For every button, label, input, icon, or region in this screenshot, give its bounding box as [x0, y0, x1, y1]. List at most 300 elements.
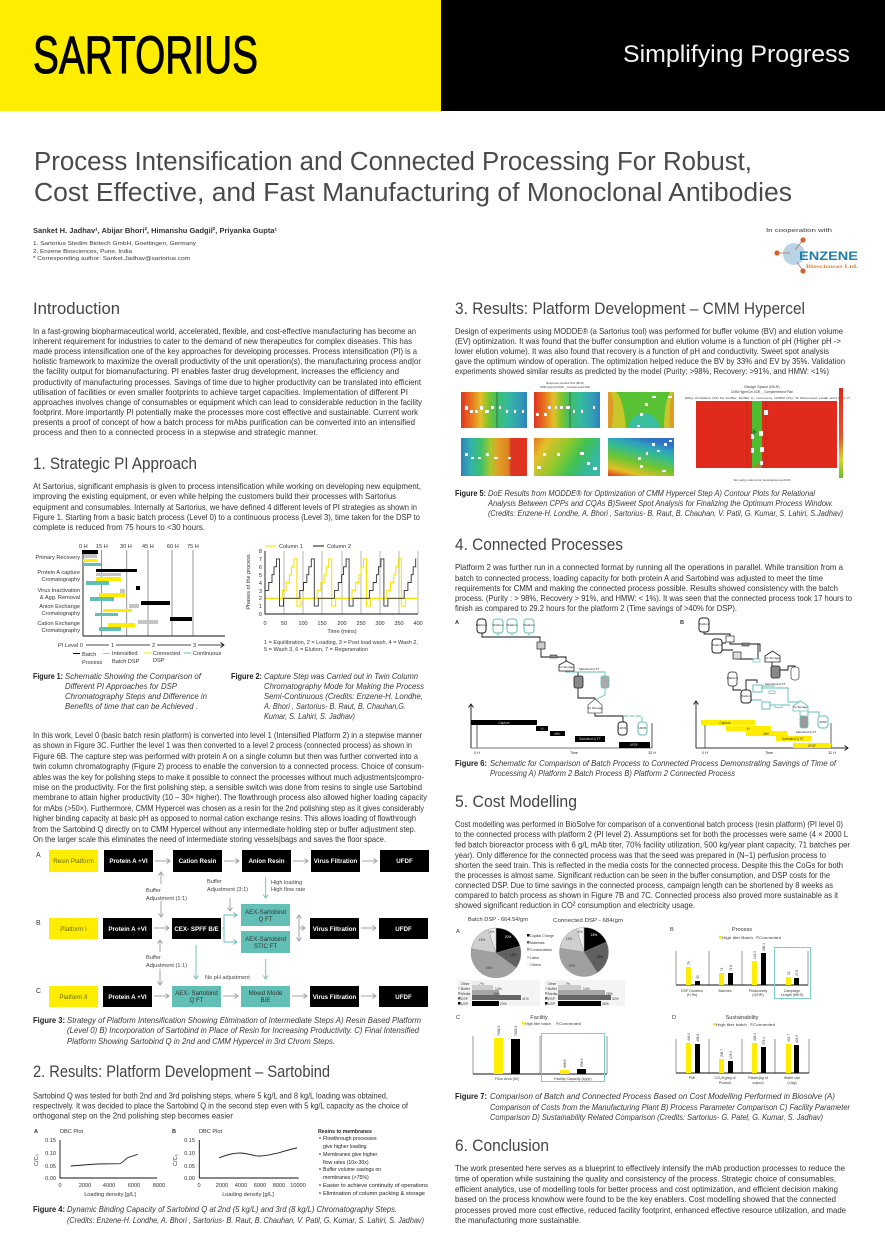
pie: batch DSP: 20%: [505, 935, 511, 939]
pie: batch DSP: 6%: [490, 930, 494, 934]
text block: introduction: process and then to a connected process in a stepwise and strategic manner.: [33, 427, 318, 437]
title: Process Intensification and Connected Processing For Robust,: [34, 148, 752, 176]
authors and affiliations: Sanket H. Jadhav¹, Abijar Bhori², Himanshu Gadgil², Priyanka Gupta¹: [33, 226, 277, 235]
figure 7D: sustainability bars: Connected: [753, 1023, 775, 1027]
figure 5 caption: DoE Results from MODDE® for Optimization of CMM Hypercel Step A) Contour Plots for Relational: [488, 488, 816, 498]
list: resins to membranes: Easier to achieve continuity of operations: [323, 1183, 428, 1189]
figure 7B: process bars: DSP Duration: [681, 989, 703, 993]
text block: cost modelling: connected DSP. Due to time savings in the connected process, campaign length can be shortened by 8 weeks as: [455, 880, 833, 890]
figure 7B: process bars: Campaign: [784, 989, 800, 993]
text block: CMM Hypercel: [455, 326, 845, 376]
row C: platform II: Protein A +VI: [108, 994, 147, 1001]
text block: connected processes: process. (Purity : > 98%, Recovery > 91%, and HMW: < 1%). It was seen that the connected process took 17 hours to: [455, 593, 852, 603]
figure 7B: process bars: High titer Batch: [722, 936, 753, 940]
text block: level conversion description: mise on the productivity. For the first polishing step, a sensible switch was done from resins to single use Sartobind: [33, 782, 422, 792]
figure 6B: connected process schematic: Sartobind Q FT: [796, 730, 816, 734]
figure 1: Gantt chart of PI approaches: 45 H: [142, 544, 154, 550]
text block: introduction: approaches involves change of consumables or equipment which can lead to considerable reduction in the facility: [33, 397, 423, 407]
pie legend: Others: [530, 963, 541, 967]
figure 7B: process bars: B: [670, 927, 674, 933]
figure 1: Gantt chart of PI approaches: 3: [193, 643, 196, 649]
row B: platform I: CEX- SPFF B/E: [174, 926, 219, 933]
figure 7C: facility bars: 498.6: [563, 1059, 567, 1068]
figure 4 caption: (Credits: Enzene-H. Londhe, A. Bhori , Sartorius- B. Raut, B. Chauhan, V. Patil, G. Kumar, S. Lahiri, S. Jadhav): [67, 1215, 424, 1225]
list: resins to membranes: Elimination of column packing & storage: [323, 1191, 425, 1197]
figure 1 caption: Different PI Approaches for DSP: [65, 681, 177, 691]
authors and affiliations: * Corresponding author: Sanket.Jadhav@sartorius.com: [33, 256, 190, 262]
row C: platform II: UFDF: [395, 994, 412, 1001]
figure 7D: sustainability bars: Sustainability: [726, 1015, 759, 1021]
figure 7D: sustainability bars: Product: [719, 1081, 731, 1085]
figure 4A: DBC plot: 0.00: [45, 1176, 56, 1182]
row C: platform II: AEX- Sartobind: [175, 990, 218, 997]
row A: resin platform: [36, 850, 429, 872]
bars: batch breakdown: 14%: [495, 987, 502, 991]
figure 7B: process bars: 142.9: [753, 951, 757, 959]
figure 6A: batch process schematic: Sartobind Q FT: [579, 667, 599, 671]
row B: platform I: [36, 904, 428, 953]
figure 4B: DBC plot: DBC Plot: [199, 1129, 222, 1135]
figure 2: twin column phase chart: 200: [337, 621, 347, 627]
figure 7D: sustainability bars: 448.4: [753, 1033, 757, 1041]
authors and affiliations: 2. Enzene Biosciences, Pune, India: [33, 249, 133, 255]
figure 1: Gantt chart of PI approaches: Batch DSP: [112, 659, 140, 665]
figure 4A: DBC plot: A: [34, 1129, 38, 1135]
figure 7A: cost pies and bars: Connected DSP - 684/gm: [553, 918, 623, 924]
figure 7B: process bars: (G/HR): [752, 993, 764, 997]
text block: strategic PI approach: improving the existing equipment, or even while helping the customers build their processes with Sartorius: [33, 491, 396, 501]
figure 1: Gantt chart of PI approaches: & Agg. Removal: [40, 595, 80, 601]
heading: Connected Processes: 4. Connected Processes: [455, 536, 623, 554]
figure 4A: DBC plot: [34, 1129, 165, 1198]
timeline B: VI: [746, 727, 750, 731]
figure 2: twin column phase chart: 1: [259, 604, 262, 610]
text block: conclusion: time of operation while sustaining the quality and consistency of the process. Strategic choice of consumables,: [455, 1174, 836, 1184]
text block: level conversion description: twin column chromatography (Figure 2) process to enable the conversion to a connected process. Choice of consum-: [33, 761, 424, 771]
figure 6A: batch process schematic: A: [455, 620, 459, 626]
figure 2: twin column phase chart: Time (mins): [327, 629, 357, 635]
text block: level conversion description: In this work, Level 0 (basic batch resin platform) is converted into level 1 (Intensified Platform 2) in a stepwise manner: [33, 730, 422, 740]
figure 1: Gantt chart of PI approaches: Cromatography: [41, 611, 80, 617]
figure 4B: DBC plot: C/C₀: [173, 1153, 179, 1166]
bars: connected breakdown: 28%: [606, 992, 613, 996]
text block: connected processes: [455, 562, 852, 613]
figure 6B: connected process schematic: Platform: [740, 694, 752, 698]
figure 2: twin column phase chart: 8: [259, 549, 262, 555]
figure 1: Gantt chart of PI approaches: 75 H: [187, 544, 199, 550]
bars: connected breakdown: DSP: [548, 997, 556, 1001]
figure 7B: process bars: 186.4: [762, 943, 766, 951]
text block: connected processes: Platform 2 was further run in a connected format by running all the operations in parallel. While transition from a: [455, 562, 843, 572]
figure 2: twin column phase chart: 4: [259, 581, 262, 587]
row B: platform I: Protein A +VI: [108, 926, 147, 933]
bars: batch breakdown: Buffer: [461, 987, 471, 991]
figure 7B: process bars: 52: [787, 971, 791, 975]
bars: connected breakdown: [545, 980, 625, 1006]
figure 4A: DBC plot: C/C₀: [34, 1153, 40, 1166]
figure 7B: process bars: Batches: [718, 989, 732, 993]
process flow lines: [704, 632, 819, 716]
figure 1: Gantt chart of PI approaches: 15 H: [96, 544, 108, 550]
figure 5A: DoE contour plots: Response Contour Plot (MLR): [546, 381, 584, 385]
figure 4B: DBC plot: 8000: [273, 1183, 285, 1189]
row C: platform II: [36, 986, 428, 1007]
figure 7D: sustainability bars: Water use: [784, 1076, 800, 1080]
text block: introduction: presents a proof of concept of how a batch process for mAbs purification can be converted into an intensified: [33, 417, 415, 427]
timeline A: VI: [540, 727, 544, 731]
timeline A: Time: [570, 751, 578, 755]
list: resins to membranes: Flowthrough processes: [323, 1136, 377, 1142]
figure 7C: facility bars: 598.5: [580, 1058, 584, 1067]
contour panels: [461, 392, 674, 476]
heading: Platform Development Sartobind: 2. Results: Platform Development – Sartobind: [33, 1063, 330, 1081]
text block: level conversion description: as shown in Figure 3C. Further the level 1 was then converted to a level 2 process (connected process) as shown in: [33, 740, 412, 750]
connector annotations: High flow rate: [271, 887, 305, 893]
timeline B: Time: [765, 751, 773, 755]
title: Cost Effective, and Fast Manufacturing of Monoclonal Antibodies: [34, 179, 792, 207]
bars: batch breakdown: [458, 980, 540, 1006]
figure 7C: facility bars: Connected: [559, 1022, 581, 1026]
row B: platform I: Q FT: [258, 916, 273, 923]
pie: connected DSP: 37%: [569, 964, 575, 968]
text block: cost modelling: fed batch bioreactor process with 6 g/L mAb titer, 70% facility utilization, 500 kg/year plant capacity, 71 batches per: [455, 840, 850, 850]
text block: level conversion description: for mAbs (>50×). Furthermore, CMM Hypercel was chosen as a resin for the 2nd polishing step as it gives considerably: [33, 803, 425, 813]
text block: cost modelling: shorten the seed train. This is reflected in the media costs for the connected process. Despite this the CoGs for both: [455, 860, 843, 870]
figure 1: Gantt chart of PI approaches: Cation Exchange: [37, 621, 80, 627]
timeline A: Sartobind Q FT: [579, 737, 601, 741]
figure 6B: connected process schematic: Platform: [727, 676, 739, 680]
figure 4 caption: [33, 1204, 424, 1225]
figure 7A: cost pies and bars: [456, 917, 625, 1006]
figure 3 caption: Figure 3:: [33, 1015, 65, 1025]
figure 1: Gantt chart of PI approaches: Primary Recovery: [36, 555, 80, 561]
figure 1: Gantt chart of PI approaches: Cromatography: [41, 577, 80, 583]
timeline B: UFDF: [808, 744, 816, 748]
row A: resin platform: Anion Resin: [248, 858, 285, 865]
bars: batch breakdown: Other: [461, 982, 470, 986]
figure 1: Gantt chart of PI approaches: Process: [82, 660, 102, 666]
row A: resin platform: Resin Platform: [53, 858, 94, 865]
text block: introduction: made process intensification one of the key approaches for developing processes. Process intensification (PI) is a: [33, 346, 417, 356]
figure 4A: DBC plot: 4000: [103, 1183, 115, 1189]
bars: connected breakdown: Other: [548, 982, 557, 986]
figure 2: twin column phase chart: Column 1: [279, 544, 303, 550]
figure 2: twin column phase chart: 5: [259, 573, 262, 579]
figure 5B: sweet spot plot: Not using model error, Acceptance level=0%: [734, 478, 791, 482]
figure 2: twin column phase chart: 350: [394, 621, 404, 627]
heading: Strategic PI Approach: 1. Strategic PI Approach: [33, 455, 197, 473]
connector annotations: High loading: [271, 880, 302, 886]
pie legend: Capital Charge: [530, 934, 554, 938]
text block: strategic PI approach: Figure 1. Starting from a basic batch process (Level 0) to a continuous process (Level 3), time taken for the DSP to: [33, 512, 420, 522]
figure 6A: batch process schematic: Platform: [523, 623, 535, 627]
bars: batch breakdown: Media: [461, 992, 470, 996]
figure 4B: DBC plot: 0.00: [184, 1176, 195, 1182]
figure 4B: DBC plot: 0.10: [184, 1151, 195, 1157]
row B: platform I: AEX-Sartobind: [245, 909, 287, 916]
timeline B: MM: [763, 732, 769, 736]
text block: conclusion: [455, 1163, 846, 1225]
figure 7B: process bars: 71: [720, 967, 724, 971]
timeline B: Sartobind Q FT: [782, 737, 804, 741]
bars: batch breakdown: 7%: [479, 982, 484, 986]
figure 5 caption: (Credits: Enzene-H. Londhe, A. Bhori , Sartorius- B. Raut, B. Chauhan, V. Patil, G. Kumar, S. Lahiri, S.Jadhav): [488, 508, 843, 518]
timeline A: 0 H: [474, 751, 480, 755]
timeline A: UFDF: [630, 743, 638, 747]
figure 4A: DBC plot: Loading density [g/L]: [84, 1192, 136, 1198]
bars: connected breakdown: USP: [548, 1002, 556, 1006]
figure 6B: connected process schematic: B: [680, 620, 684, 626]
figure 2: twin column phase chart: 6: [259, 565, 262, 571]
row C: platform II: Mixed Mode: [249, 990, 283, 997]
figure 4B: DBC plot: Loading density [g/L]: [222, 1192, 274, 1198]
figure 2: twin column phase chart: Column 2: [327, 544, 351, 550]
figure 2: twin column phase chart: 50: [281, 621, 287, 627]
figure 5A: DoE contour plots: CMM HyperCel DOE _ Complemented Plan: [540, 385, 591, 389]
connector annotations: Buffer: [146, 955, 161, 961]
text block: conclusion: processes proved more cost effective, reduced facility footprint, enhanced effective resource utilization, and made: [455, 1205, 846, 1215]
figure 2 caption: Kumar, S. Lahiri, S. Jadhav): [264, 711, 355, 721]
figure 6 caption: Schematic for Comparison of Batch Process to Connected Process Demonstrating Savings of Time of: [490, 758, 838, 768]
figure 7B: process bars: [670, 927, 810, 998]
figure 4B: DBC plot: 2000: [216, 1183, 228, 1189]
figure 1: Gantt chart of PI approaches: Batch: [82, 652, 96, 658]
timeline A: [471, 704, 656, 755]
figure 1: Gantt chart of PI approaches: 30 H: [120, 544, 132, 550]
row A: resin platform: UFDF: [396, 858, 413, 865]
figure 7D: sustainability bars: CO₂/Kg/kg of: [715, 1076, 735, 1080]
header band: black with slogan: Simplifying Progress: [623, 41, 850, 68]
figure 4A: DBC plot: 0: [58, 1183, 62, 1189]
figure 2: twin column phase chart: 300: [375, 621, 385, 627]
heading: Conclusion: 6. Conclusion: [455, 1137, 549, 1155]
timeline B: Capture: [719, 721, 731, 725]
figure 6A: batch process schematic: [455, 619, 656, 755]
text block: conclusion: based on the process knowhow were found to be the key enablers. Cost modelling showed that the connected: [455, 1194, 836, 1204]
row B: platform I: B: [36, 920, 41, 927]
text block: Sartobind: [33, 1090, 409, 1120]
figure 7D: sustainability bars: 404.7: [787, 1034, 791, 1042]
figure 7B: process bars: Productivity: [749, 989, 767, 993]
bars: connected breakdown: 7%: [565, 982, 570, 986]
text block: strategic PI approach: equipment and consumables. Internally at Sartorius, we have defined 4 different levels of PI strategies as shown in: [33, 502, 417, 512]
title: [34, 148, 792, 207]
bars: connected breakdown: 26%: [602, 1002, 609, 1006]
figure 1: Gantt chart of PI approaches: 0 H: [79, 544, 88, 550]
logo: Sartorius: SARTORIUS: [33, 26, 258, 85]
figure 1: Gantt chart of PI approaches: 2: [152, 643, 155, 649]
text block: CMM Hypercel: (EV) optimization. It was found that the buffer consumption and elution volume is a function of pH (Higher pH ->: [455, 336, 841, 346]
figure 2: twin column phase chart: 250: [356, 621, 366, 627]
figure 7C: facility bars: C: [456, 1015, 460, 1021]
cooperation partner logo: Enzene: Biosciences Ltd.: [806, 264, 859, 270]
row C: platform II: Platform II: [59, 994, 88, 1001]
authors and affiliations: [33, 226, 277, 262]
row A: resin platform: Protein A +VI: [109, 858, 148, 865]
text block: level conversion description: ables was the key for polishing steps to make it possible to connect the processes without much adjustments|compro-: [33, 772, 424, 782]
figure 6B: connected process schematic: Int Storage: [793, 705, 808, 709]
row C: platform II: B/E: [261, 997, 270, 1004]
pie: batch DSP: 13%: [510, 953, 516, 957]
figure 6A: batch process schematic: Platform: [506, 623, 518, 627]
text block: introduction: inherent requirement for industries to cater to the demand of new therapeutics for complex diseases. This has: [33, 336, 412, 346]
text block: connected processes: finish as compared to 29.2 hours for the platform 2 (Time savings of >40% for DSP).: [455, 603, 737, 613]
timeline A: 32 H: [648, 751, 656, 755]
figure 6A: batch process schematic: Int Storage: [588, 706, 603, 710]
figure 4A: DBC plot: DBC Plot: [60, 1129, 83, 1135]
text block: cost modelling: compared to batch process as shown in Figure 7B and 7C. Connected process also proved more sustainable as it: [455, 890, 839, 900]
list: resins to membranes: give higher loading: [323, 1144, 367, 1150]
figure 1: Gantt chart of PI approaches: PI Level 0: [58, 643, 83, 649]
figure 7C: facility bars: Floor Area (ft2): [495, 1077, 519, 1081]
figure 7D: sustainability bars: 178.9: [729, 1051, 733, 1059]
text block: level conversion description: from the Sartobind Q directly on to CMM Hypercel without any intermediate holding step or buffer adjustment step.: [33, 824, 416, 834]
figure 6A: batch process schematic: Int Storage: [559, 665, 574, 669]
figure 4A: DBC plot: 6000: [128, 1183, 140, 1189]
text block: level conversion description: On the larger scale this eliminates the need of intermediate storing vessels|bags and saves the floor space.: [33, 834, 386, 844]
connector annotations: Buffer: [207, 879, 222, 885]
figure 2 caption: [231, 671, 425, 721]
figure 1: Gantt chart of PI approaches: Protein A capture: [37, 570, 80, 576]
figure 7A: cost pies and bars: A: [456, 929, 460, 935]
figure 4A: DBC plot: 0.10: [45, 1151, 56, 1157]
figure 2 caption: Capture Step was Carried out in Twin Column: [264, 671, 418, 681]
figure 5 caption: [455, 488, 843, 518]
figure 5A: DoE contour plots: [461, 381, 674, 476]
figure 7 caption: Comparison of Costs from the Manufacturing Plant B) Process Parameter Comparison C) Facility Parameter: [490, 1102, 851, 1112]
text block: strategic PI approach: At Sartorius, significant emphasis is given to process intensification while working on developing new equipment,: [33, 481, 421, 491]
text block: introduction: productivity of manufacturing processes. Savings of time due to higher productivity can be translated into efficient: [33, 377, 422, 387]
text block: cost modelling: year). Only difference for the connected process was that the seed was prepared in (N–1) perfusion process to: [455, 850, 826, 860]
figure 1: Gantt chart of PI approaches: Intensified: [112, 651, 138, 657]
figure 7A: cost pies and bars: Batch DSP - 664.54/gm: [468, 917, 528, 923]
text block: connected processes: batch to connected process, loading capacity for both protein A and Sartobind was adjusted to meet the time: [455, 573, 823, 583]
figure 4B: DBC plot: 10000: [290, 1183, 306, 1189]
timeline B: 0 H: [702, 751, 708, 755]
figure 1: Gantt chart of PI approaches: DSP: [153, 658, 165, 664]
text block: level conversion description: [33, 730, 428, 844]
connector annotations: No pH adjustment: [205, 975, 250, 981]
figure 1 caption: Schematic Showing the Comparison of: [65, 671, 203, 681]
figure 6B: connected process schematic: Platform: [711, 643, 723, 647]
figure 6A: batch process schematic: Platform: [476, 623, 488, 627]
figure 7B: process bars: (H Rs): [687, 993, 697, 997]
list: resins to membranes: Resins to membranes: [318, 1129, 372, 1135]
bars: batch breakdown: USP: [461, 1002, 469, 1006]
figure 5B: sweet spot plot: bility of failure (%) for buffer, buffer C, recovery, HMW (%), % Monomer peak and Unit Yi: [685, 396, 850, 400]
text block: CMM Hypercel: Design of experiments using MODDE® (a Sartorius tool) was performed for buffer volume (BV) and elution volume: [455, 326, 843, 336]
figure 4A: DBC plot: 0.15: [45, 1138, 56, 1144]
figure 6B: connected process schematic: Platform: [698, 622, 710, 626]
pie: connected DSP: 18%: [591, 933, 597, 937]
bars: connected breakdown: 14%: [583, 987, 590, 991]
figure 4 caption: Dynamic Binding Capacity of Sartobind Q at 2nd (5 kg/L) and 3rd (8 kg/L) Chromatography Steps.: [67, 1204, 397, 1214]
timeline A: MM: [554, 732, 560, 736]
figure 3 caption: [33, 1015, 421, 1046]
heading: Cost Modelling: 5. Cost Modelling: [455, 793, 577, 811]
header band: yellow with logo: [0, 0, 441, 111]
figure 7C: facility bars: [456, 1015, 607, 1082]
bars: batch breakdown: 16%: [493, 992, 500, 996]
connector annotations: Adjustment (3:1): [207, 887, 248, 893]
text block: cost modelling: showed significant reduction in CO² consumption and electricity usage.: [455, 900, 695, 910]
timeline A: Capture: [498, 721, 510, 725]
figure 7B: process bars: 78: [687, 961, 691, 965]
pie legend: Consumables: [530, 948, 552, 952]
text block: introduction: In a fast-growing biopharmaceutical world, accelerated, flexible, and cost-effective manufacturing has become an: [33, 326, 416, 336]
text block: cost modelling: the processes is almost same. Significant reduction can be seen in the buffer consumption, and DSP costs for the: [455, 870, 830, 880]
figure 7B: process bars: Process: [732, 927, 752, 933]
figure 7D: sustainability bars: Plastic(kg of: [748, 1076, 768, 1080]
figure 6B: connected process schematic: UFDF: [819, 720, 827, 724]
figure 1 caption: Benefits of time that can be Achieved .: [65, 701, 198, 711]
cooperation partner logo: Enzene: [766, 228, 859, 274]
figure 7D: sustainability bars: High titer batch: [716, 1023, 747, 1027]
text block: cost modelling: [455, 819, 850, 910]
figure 2 caption: A. Bhori , Sartorius- B. Raut, B. Chauhan,G.: [263, 701, 406, 711]
figure 7C: facility bars: High titer batch: [525, 1022, 551, 1026]
text block: introduction: [33, 326, 423, 437]
figure 7 caption: Comparison of Batch and Connected Process Based on Cost Modelling Performed in Biosolve (A): [490, 1091, 835, 1101]
figure 4B: DBC plot: 0: [197, 1183, 201, 1189]
row A: resin platform: Cation Resin: [179, 858, 217, 865]
figure 1 caption: Figure 1:: [33, 671, 63, 681]
figure 7B: process bars: 71.6: [729, 965, 733, 971]
figure 3 caption: Strategy of Platform Intensification Showing Elimination of Intermediate Steps A) Resin Based Platform: [67, 1015, 421, 1025]
figure 7D: sustainability bars: PMI: [689, 1076, 695, 1080]
row C: platform II: Virus Filtration: [313, 994, 356, 1001]
cooperation partner logo: Enzene: ENZENE: [799, 249, 858, 263]
process flow lines: [482, 633, 642, 722]
figure 7D: sustainability bars: 448.9: [687, 1033, 691, 1041]
figure 2: twin column phase chart: [246, 544, 423, 653]
figure 7D: sustainability bars: 206.7: [720, 1049, 724, 1057]
figure 4B: DBC plot: 6000: [254, 1183, 266, 1189]
figure 2 caption: Figure 2:: [231, 671, 262, 681]
figure 2: twin column phase chart: 100: [298, 621, 308, 627]
figure 4B: DBC plot: 0.05: [184, 1164, 195, 1170]
heading: Introduction: Introduction: [33, 300, 120, 318]
figure 1: Gantt chart of PI approaches: Anion Exchange: [39, 604, 80, 610]
pie: connected DSP: 26%: [597, 955, 603, 959]
figure 5B: sweet spot plot: [685, 385, 850, 482]
figure 6 caption: Processing A) Platform 2 Batch Process B) Platform 2 Connected Process: [490, 768, 736, 778]
connector annotations: [146, 872, 305, 985]
figure 7D: sustainability bars: output): [752, 1081, 764, 1085]
pie: connected DSP: 15%: [566, 937, 572, 941]
figure 7 caption: Comparison D) Sustainability Related Comparison (Credits: Sartorius- G. Patel, G. Kumar, S. Jadhav): [490, 1112, 823, 1122]
text block: level conversion description: membrane to attain higher productivity (10 – 30× higher). The flowthrough process also allowed higher loading capacity: [33, 792, 428, 802]
figure 2: twin column phase chart: 400: [413, 621, 423, 627]
figure 5 caption: Analysis Between CPPs and CQAs B)Sweet Spot Analysis for Finalizing the Optimum Process Window.: [487, 498, 833, 508]
figure 7B: process bars: Length (WKS): [781, 993, 803, 997]
pie legend: Labor: [530, 956, 540, 960]
figure 1: Gantt chart of PI approaches: Cromatography: [41, 628, 80, 634]
pie: batch DSP: 15%: [479, 938, 485, 942]
row B: platform I: Platform I: [60, 926, 87, 933]
figure 7D: sustainability bars: 376.4: [762, 1037, 766, 1045]
figure 2: twin column phase chart: 5 = Wash 3, 6 = Elution, 7 = Regeneration: [264, 647, 368, 653]
bars: batch breakdown: DSP: [461, 997, 469, 1001]
figure 1 caption: [33, 671, 207, 711]
text block: introduction: holistic framework to maximize the overall productivity of the unit operation(s), the manufacturing process and|or: [33, 356, 421, 366]
figure 2: twin column phase chart: 1 = Equilibration, 2 = Loading, 3 = Post load wash, 4 = Wash 2,: [264, 640, 419, 646]
row B: platform I: AEX-Sartobind: [245, 936, 287, 943]
text block: strategic PI approach: [33, 481, 421, 532]
text block: CMM Hypercel: lower elution volume). It was also found that recovery is a function of pH and conductivity. Sweet spot analysis: [455, 346, 829, 356]
row A: resin platform: A: [36, 852, 41, 859]
figure 3 caption: Platform Showing Sartobind Q in 2nd and CMM Hypercel in 3rd Chrom Steps.: [67, 1036, 335, 1046]
